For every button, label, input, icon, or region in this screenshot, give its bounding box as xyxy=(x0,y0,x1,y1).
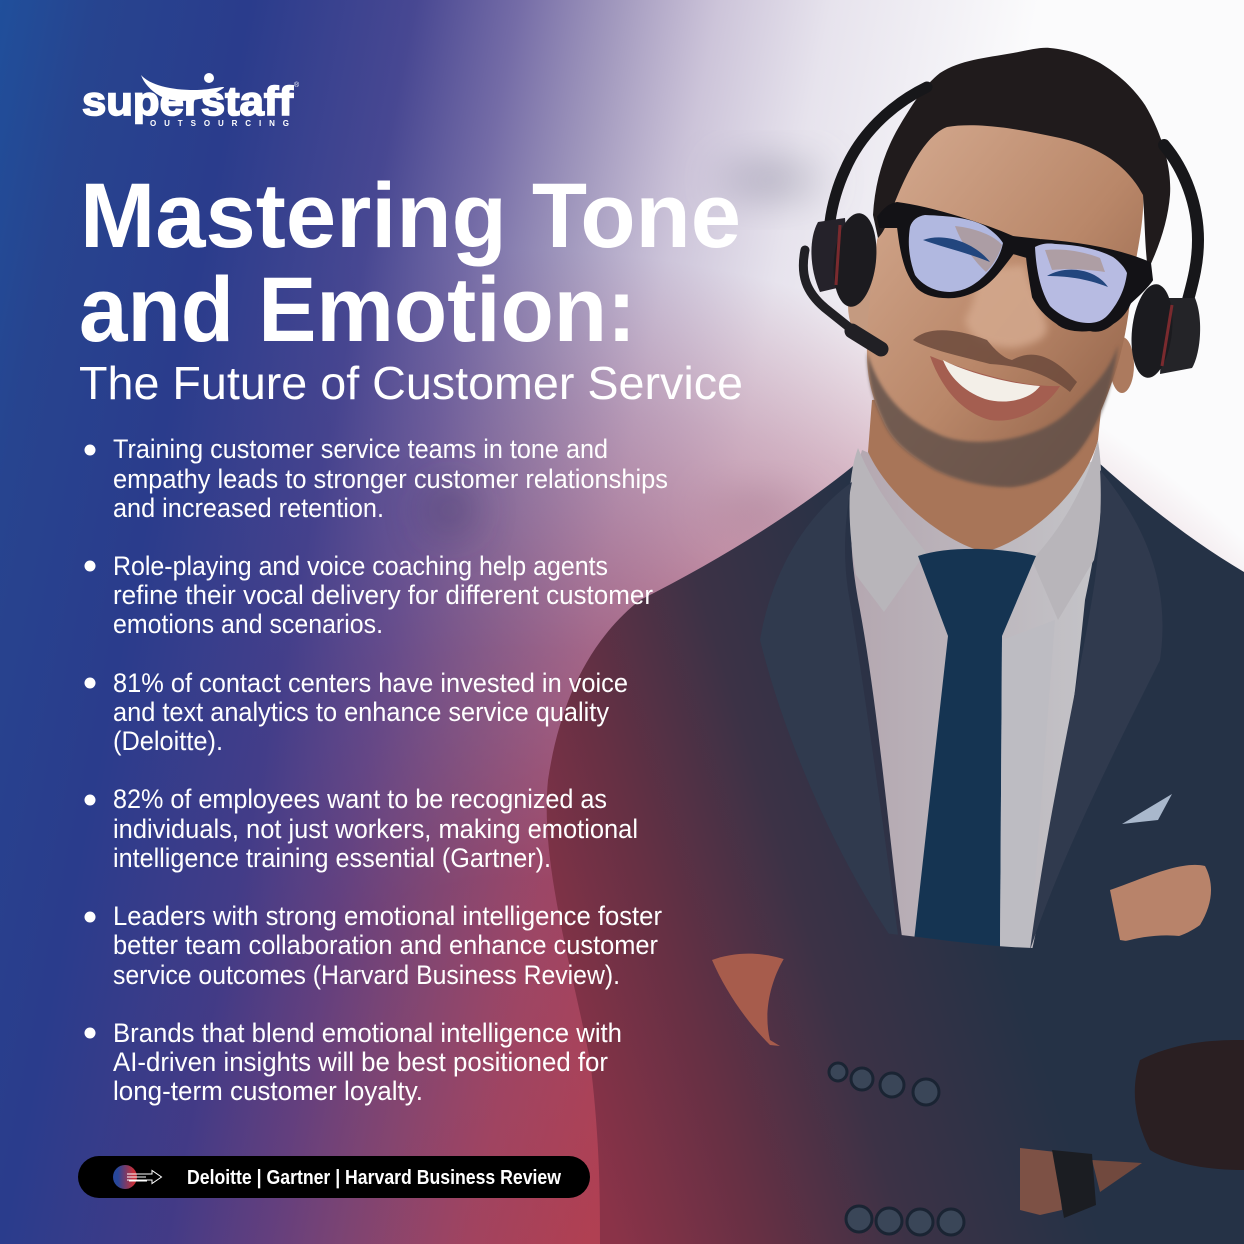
title: and Emotion: xyxy=(79,259,636,361)
bullet 4: 82% of employees want to be recognized as xyxy=(113,784,607,814)
collar xyxy=(850,440,1101,620)
watch xyxy=(1052,1150,1096,1218)
bullet 1 xyxy=(84,434,668,523)
logo dot xyxy=(204,73,214,83)
moustache xyxy=(913,330,1077,392)
bullet 6: AI-driven insights will be best positioned for xyxy=(113,1047,608,1077)
bullet 3 xyxy=(84,668,628,756)
bullet 1: empathy leads to stronger customer relationships xyxy=(113,464,668,494)
pocket square xyxy=(1122,794,1172,824)
sources pill xyxy=(78,1156,590,1198)
shirt xyxy=(851,450,1099,960)
bullet list xyxy=(84,434,668,1106)
right earcup xyxy=(1127,282,1200,380)
subtitle: The Future of Customer Service xyxy=(79,357,743,409)
photo: smiling agent with headset xyxy=(547,48,1244,1244)
bullet 2 xyxy=(84,551,653,639)
bullet 6 xyxy=(84,1018,622,1106)
crossed sleeve xyxy=(767,930,1244,1244)
jacket lapels xyxy=(760,470,1162,950)
bullet 5: service outcomes (Harvard Business Review). xyxy=(113,960,620,990)
right eye xyxy=(1047,270,1108,287)
icon: gradient circle with arrow xyxy=(113,1165,162,1189)
logo swoosh xyxy=(141,75,224,101)
elbow patch xyxy=(1135,1040,1244,1170)
left lens xyxy=(909,215,1003,292)
left ear xyxy=(848,273,876,337)
hair xyxy=(873,48,1170,270)
shirt panel beside tie xyxy=(1000,620,1055,950)
bullet 6: Brands that blend emotional intelligence with xyxy=(113,1018,622,1048)
right lens xyxy=(1035,243,1127,323)
logo tagline: OUTSOURCING xyxy=(150,119,289,128)
suit jacket xyxy=(547,462,1244,1244)
nose xyxy=(965,265,1047,348)
bullet 5: better team collaboration and enhance customer xyxy=(113,930,658,960)
bullet 4: intelligence training essential (Gartner). xyxy=(113,843,551,873)
bullet 2: Role-playing and voice coaching help agents xyxy=(113,551,608,581)
logo wordmark: superstaff xyxy=(82,78,293,124)
bullet 3: and text analytics to enhance service quality xyxy=(113,697,609,727)
sleeve buttons xyxy=(829,1063,964,1235)
bullet 1: Training customer service teams in tone and xyxy=(113,434,608,464)
necktie xyxy=(913,549,1036,950)
logo: superstaff outsourcing xyxy=(82,73,300,128)
bullet 1: and increased retention. xyxy=(113,493,384,523)
glasses xyxy=(878,203,1152,331)
fingers xyxy=(1092,1160,1142,1192)
bullet 2: refine their vocal delivery for different customer xyxy=(113,580,653,610)
teeth xyxy=(943,360,1040,401)
left lens skin reflection xyxy=(955,226,1002,272)
bullet 5 xyxy=(84,901,662,990)
smile xyxy=(930,356,1060,421)
forearm left xyxy=(712,954,820,1050)
bullet 5: Leaders with strong emotional intelligence foster xyxy=(113,901,662,931)
bullet 4 xyxy=(84,784,638,873)
stubble xyxy=(867,345,1118,487)
face xyxy=(867,123,1143,487)
neck xyxy=(868,380,1104,552)
lower hand xyxy=(1020,1148,1062,1215)
bullet 6: long-term customer loyalty. xyxy=(113,1076,423,1106)
left earcup xyxy=(811,211,881,309)
microphone boom xyxy=(803,250,881,349)
bullet 3: 81% of contact centers have invested in voice xyxy=(113,668,628,698)
right ear xyxy=(1110,337,1134,393)
bullet 4: individuals, not just workers, making emotional xyxy=(113,814,638,844)
right lens skin reflection xyxy=(1045,249,1105,272)
headband xyxy=(830,87,1198,300)
left eye xyxy=(923,237,990,262)
crossed arm right hand xyxy=(1110,865,1211,942)
sources text: Deloitte | Gartner | Harvard Business Review xyxy=(187,1167,561,1189)
bullet 3: (Deloitte). xyxy=(113,726,223,756)
bullet 2: emotions and scenarios. xyxy=(113,609,383,639)
title: Mastering Tone xyxy=(80,165,741,267)
title xyxy=(79,165,741,361)
registered mark: ® xyxy=(294,81,300,89)
blurred office shape xyxy=(428,488,472,532)
